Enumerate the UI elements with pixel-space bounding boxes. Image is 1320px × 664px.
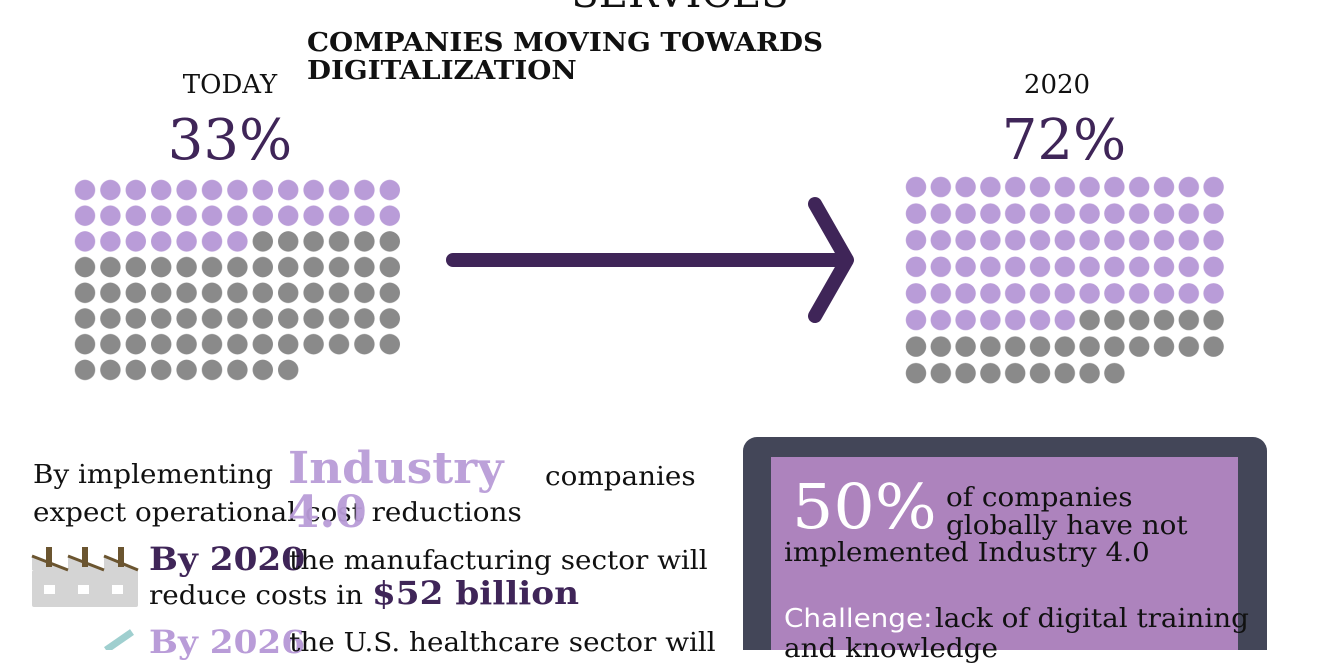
label: 2020: 2020 bbox=[1024, 70, 1090, 100]
label: today: TODAY bbox=[183, 70, 277, 100]
text: challenge bbox=[784, 604, 1249, 664]
highlight: Industry 4.0 bbox=[288, 443, 504, 538]
subtitle bbox=[307, 28, 823, 86]
text: healthcare stat: By 2026 bbox=[149, 623, 305, 661]
text: intro: expect operational cost reductions bbox=[33, 498, 522, 528]
panel: 50% stat bbox=[784, 470, 1249, 664]
text: intro: By implementing bbox=[33, 460, 273, 490]
text: companies: companies bbox=[545, 462, 696, 492]
panel background bbox=[743, 437, 1267, 664]
text: not implemented: globally have not bbox=[946, 511, 1188, 541]
text: not implemented: of companies bbox=[946, 483, 1133, 513]
arrow bbox=[453, 204, 847, 316]
text: the U.S. healthcare sector will bbox=[289, 628, 716, 658]
text: challenge: Challenge: bbox=[784, 604, 932, 634]
text: challenge: and knowledge bbox=[784, 634, 998, 664]
highlight: Industry 4.0: 4.0 bbox=[288, 487, 367, 538]
text: intro bbox=[33, 460, 522, 528]
text: not implemented bbox=[946, 483, 1188, 541]
highlight: Industry 4.0: Industry bbox=[288, 443, 503, 494]
panel: 50% stat: implemented Industry 4.0 bbox=[784, 538, 1150, 568]
text: manufacturing stat: the manufacturing sector will bbox=[289, 546, 708, 576]
dot chart: today 33 of 100 bbox=[72, 177, 403, 383]
icon: syringe bbox=[106, 632, 132, 650]
stat: 50%: 50% bbox=[792, 470, 937, 543]
text: healthcare stat bbox=[149, 623, 716, 661]
panel: 50% stat: lack of digital training bbox=[935, 604, 1249, 634]
text: manufacturing stat: By 2020 bbox=[149, 540, 305, 578]
subtitle: DIGITALIZATION bbox=[307, 56, 577, 86]
text: manufacturing stat: reduce costs in $52 billion bbox=[149, 574, 579, 612]
stat: 33%: 33% bbox=[168, 108, 292, 173]
stat: 72%: 72% bbox=[1002, 108, 1126, 173]
icon: factory bbox=[32, 547, 138, 607]
dot chart: 2020 72 of 100 bbox=[904, 174, 1226, 386]
text: manufacturing stat bbox=[149, 540, 708, 612]
subtitle: COMPANIES MOVING TOWARDS bbox=[307, 28, 823, 58]
